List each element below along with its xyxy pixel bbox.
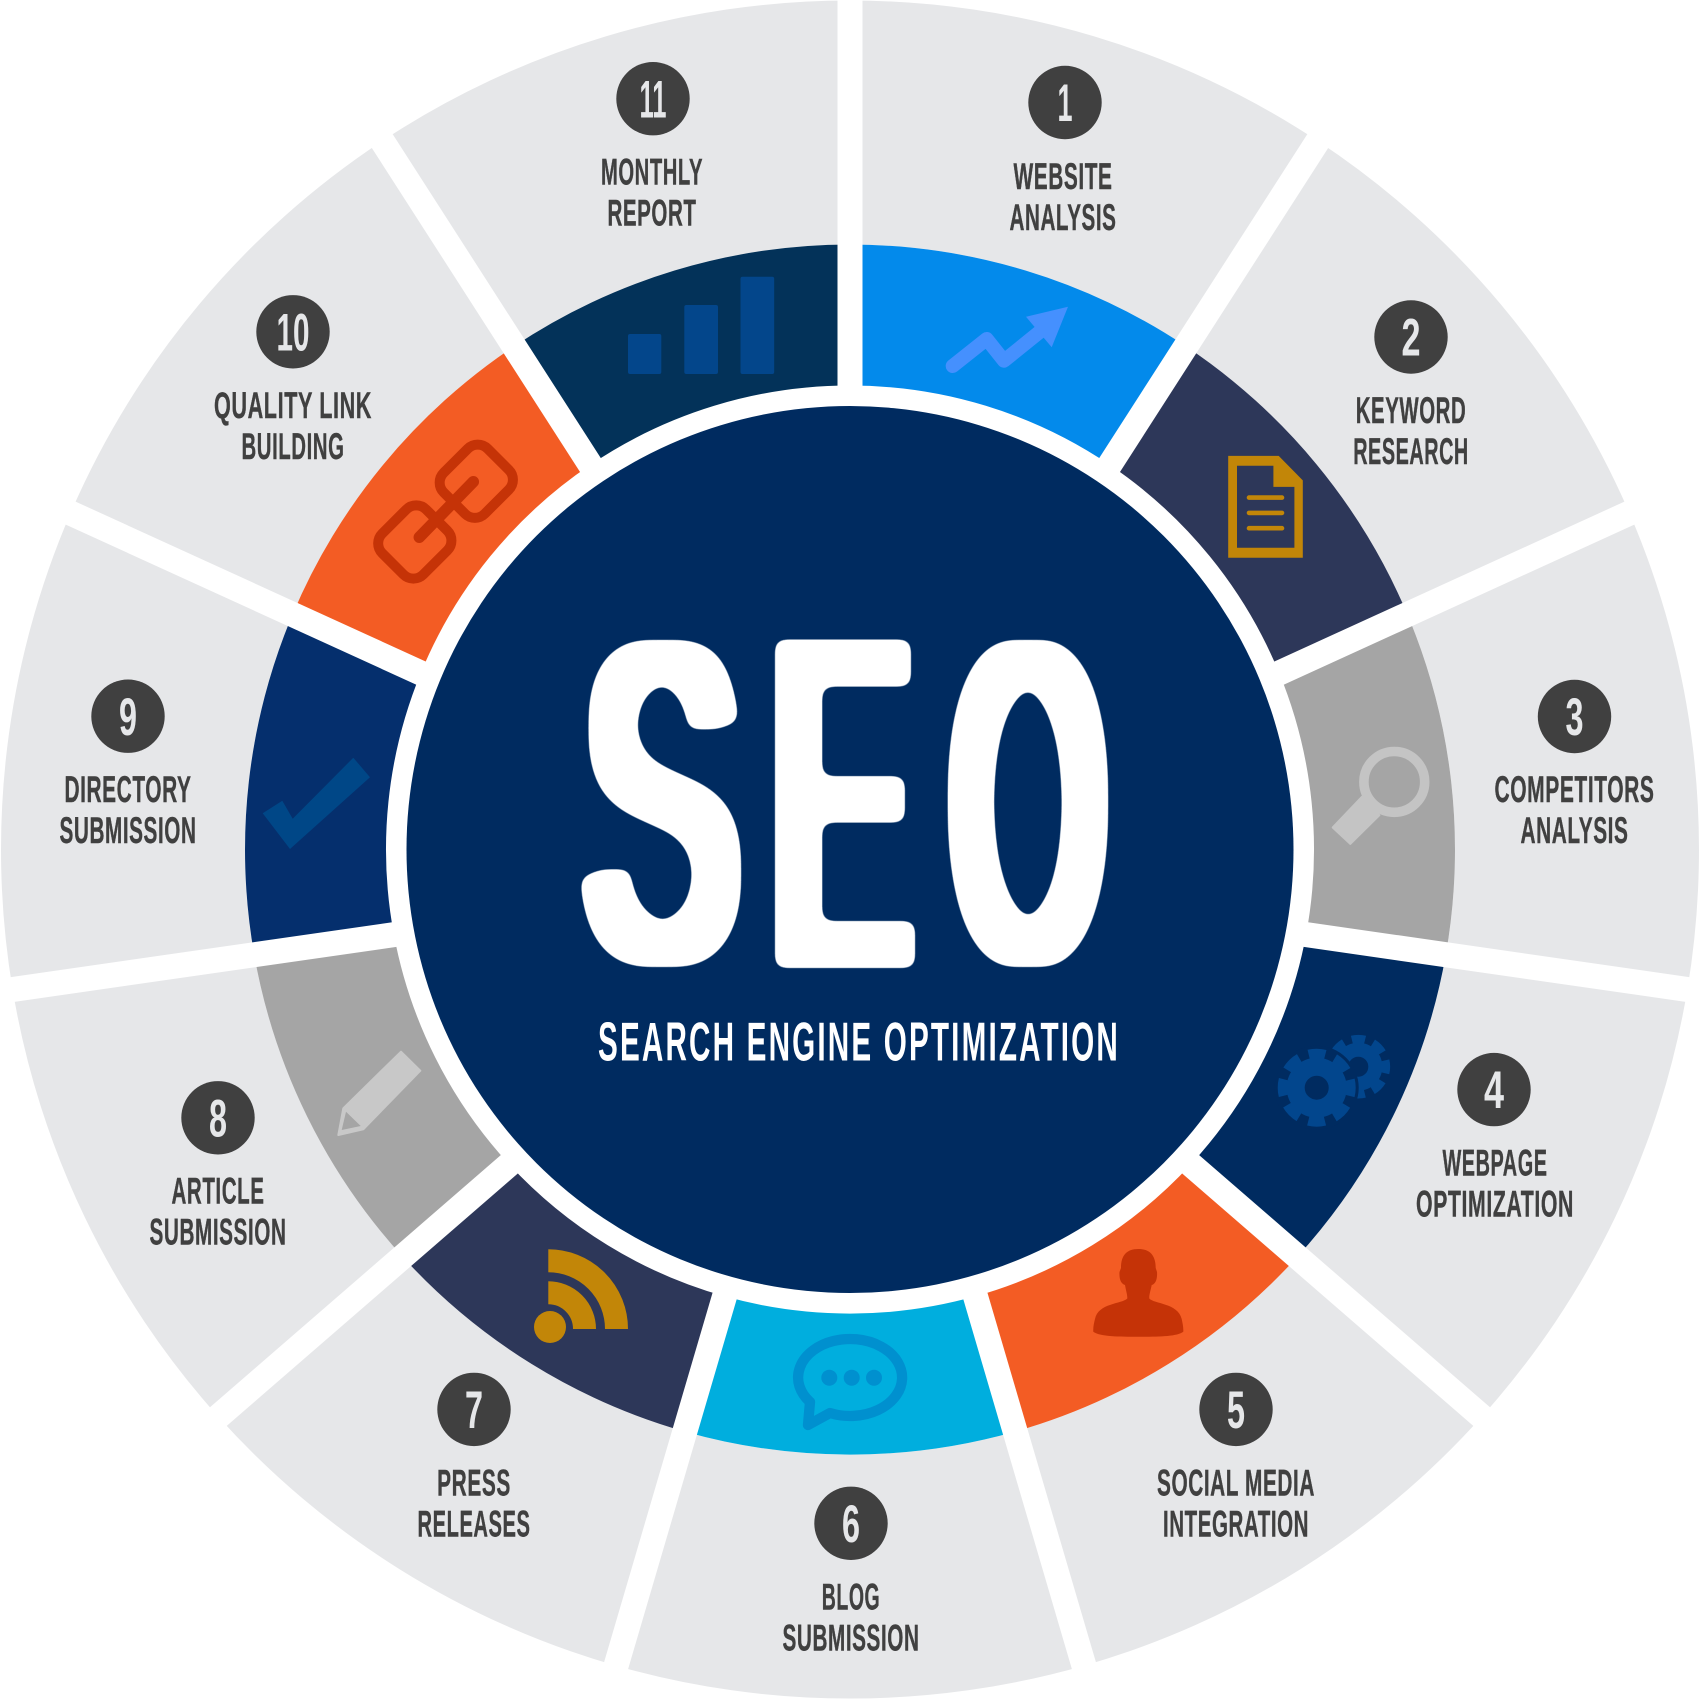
label: article submission: [150, 1170, 286, 1252]
hub circle: [406, 406, 1294, 1293]
label: quality link building: [214, 385, 372, 467]
grey outer sector 1: [850, 0, 1318, 346]
label: monthly report: REPORT: [608, 192, 696, 234]
icon: pencil: [338, 1052, 420, 1135]
label: quality link building: BUILDING: [242, 426, 344, 467]
panel: step 7 press releases: [218, 1164, 725, 1666]
label: webpage optimization: OPTIMIZATION: [1416, 1184, 1574, 1224]
label: keyword research: RESEARCH: [1353, 431, 1469, 472]
ring sector 6: [685, 1296, 1015, 1455]
number badge 5: 5: [1227, 1381, 1245, 1440]
grey outer sector 11: [382, 0, 850, 346]
number badge 11: 11: [640, 70, 666, 130]
number badge 3: 3: [1566, 688, 1584, 747]
grey outer sector 6: [616, 1432, 1084, 1699]
ring sector 2: [1110, 346, 1407, 673]
icon: bar chart: [628, 277, 774, 374]
icon: rising arrow: [953, 307, 1068, 366]
label: blog submission: [782, 1576, 920, 1658]
grey outer sector 5: [1015, 1257, 1482, 1666]
grey outer sector 7: [218, 1257, 685, 1666]
label: directory submission: DIRECTORY: [64, 769, 192, 810]
ring sector 4: [1191, 935, 1446, 1257]
label: directory submission: [60, 769, 196, 851]
label: social media integration: SOCIAL MEDIA: [1157, 1462, 1315, 1504]
ring sector 11: [514, 244, 850, 465]
title: SEO: E: [772, 547, 910, 1060]
label: website analysis: ANALYSIS: [1010, 197, 1116, 238]
panel: step 4 webpage optimization: [1191, 935, 1687, 1417]
label: website analysis: WEBSITE: [1014, 156, 1112, 197]
grey outer sector 10: [71, 141, 514, 614]
ring sector 3: [1279, 614, 1455, 955]
label: webpage optimization: [1416, 1142, 1574, 1224]
title: SEO: S: [585, 555, 738, 1052]
label: article submission: SUBMISSION: [150, 1212, 286, 1252]
label: keyword research: KEYWORD: [1356, 390, 1466, 431]
number badge 9: 9: [119, 688, 137, 747]
number badge 11: [616, 62, 690, 135]
grey outer sector 2: [1186, 141, 1629, 614]
label: monthly report: [601, 152, 703, 234]
number badge 7: 7: [465, 1381, 483, 1440]
label: press releases: [418, 1462, 530, 1544]
grey outer sector 8: [13, 955, 403, 1417]
number badge 1: [1028, 66, 1102, 139]
title: SEO: [585, 547, 1104, 1060]
number badge 10: [256, 295, 330, 368]
label: directory submission: SUBMISSION: [60, 810, 196, 851]
ring sector 8: [254, 935, 509, 1257]
label: webpage optimization: WEBPAGE: [1442, 1142, 1548, 1184]
panel: step 11 monthly report: [382, 0, 850, 465]
label: quality link building: QUALITY LINK: [214, 385, 372, 426]
panel: step 3 competitors analysis: [1279, 513, 1699, 989]
number badge 4: 4: [1484, 1061, 1504, 1120]
label: press releases: RELEASES: [418, 1504, 530, 1544]
number badge 6: 6: [842, 1495, 860, 1554]
ring sector 1: [850, 244, 1186, 465]
icon: check mark: [263, 758, 370, 849]
label: social media integration: [1157, 1462, 1315, 1544]
number badge 9: [91, 680, 165, 753]
label: monthly report: MONTHLY: [601, 152, 703, 192]
ring sector 7: [403, 1164, 725, 1432]
number badge 8: 8: [209, 1090, 227, 1148]
center hub: O: [952, 555, 1104, 1052]
label: website analysis: [1010, 156, 1116, 238]
icon: chat bubble: [798, 1339, 902, 1425]
number badge 7: [437, 1373, 511, 1446]
panel: step 9 directory submission: [1, 513, 421, 989]
label: article submission: ARTICLE: [172, 1170, 264, 1212]
grey outer sector 4: [1297, 955, 1687, 1417]
number badge 5: [1199, 1373, 1273, 1446]
ring sector 5: [975, 1164, 1297, 1432]
number badge 6: [814, 1487, 888, 1560]
panel: step 5 social media integration: [975, 1164, 1482, 1666]
panel: step 6 blog submission: [616, 1296, 1084, 1699]
ring sector 10: [293, 346, 590, 673]
center hub: [406, 406, 1294, 1293]
icon: person: [1093, 1249, 1183, 1337]
number badge 2: [1374, 300, 1448, 374]
panel: step 10 quality link building: [71, 141, 590, 673]
label: blog submission: SUBMISSION: [782, 1618, 920, 1658]
number badge 3: [1538, 680, 1611, 753]
label: competitors analysis: [1494, 769, 1654, 851]
icon: magnifying glass: [1333, 752, 1425, 844]
label: blog submission: BLOG: [822, 1576, 880, 1618]
icon: gears: [1275, 1040, 1385, 1130]
number badge 2: 2: [1402, 308, 1420, 368]
number badge 8: [181, 1081, 255, 1155]
label: keyword research: [1353, 390, 1469, 472]
number badge 1: 1: [1058, 74, 1072, 133]
subtitle: search engine optimization: SEARCH ENGINE OPTIMIZATION: [598, 1010, 1120, 1072]
panel: step 2 keyword research: [1110, 141, 1629, 673]
number badge 4: [1457, 1053, 1531, 1126]
ring sector 9: [245, 614, 421, 955]
grey outer sector 9: [1, 513, 293, 989]
label: social media integration: INTEGRATION: [1163, 1504, 1309, 1544]
panel: step 1 website analysis: [850, 0, 1318, 465]
label: press releases: PRESS: [437, 1462, 511, 1504]
icon: rss feed: [534, 1261, 616, 1343]
icon: document: [1228, 456, 1303, 558]
number badge 10: 10: [276, 304, 310, 362]
grey outer sector 3: [1407, 513, 1699, 989]
icon: chain link: [372, 439, 519, 584]
panel: step 8 article submission: [13, 935, 509, 1417]
